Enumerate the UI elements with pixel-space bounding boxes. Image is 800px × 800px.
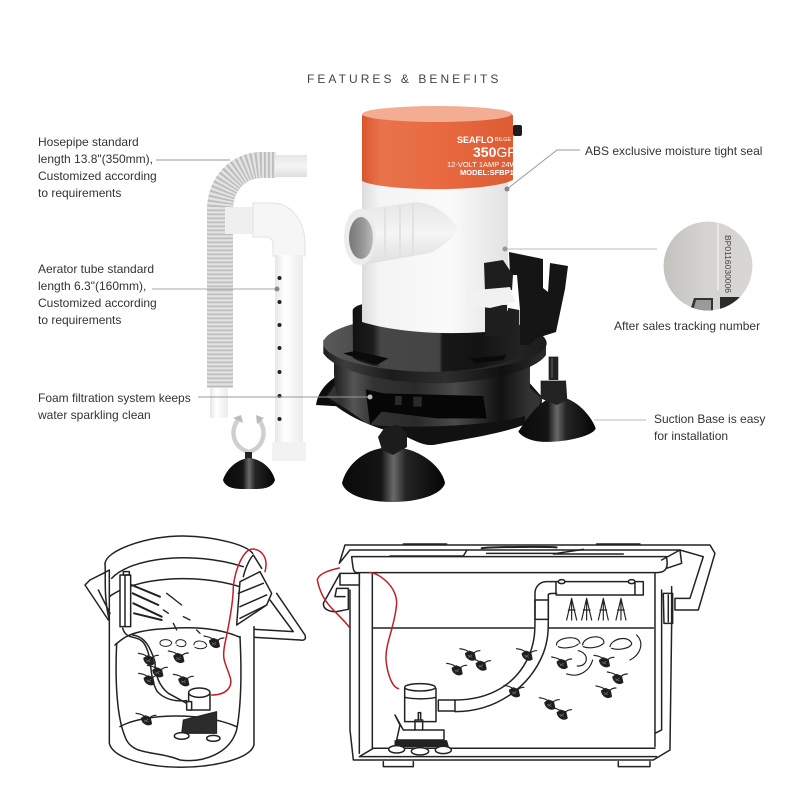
pipe: [455, 602, 535, 700]
orange cap: [362, 107, 513, 189]
leader: suction base: [594, 419, 646, 421]
text block: foam filtration: [37, 391, 191, 422]
label: 350GPH: [473, 144, 527, 160]
label: MODEL:SFBP1-G350: [460, 168, 535, 177]
text block: tracking number: After sales tracking number: [614, 319, 760, 333]
text block: hosepipe: [38, 135, 157, 200]
label: BILGE P: [495, 137, 517, 143]
bubbles: [160, 640, 207, 649]
spray lines: [132, 585, 162, 620]
right latch: [662, 550, 682, 623]
leader: tracking number: [502, 246, 657, 252]
small pump: [189, 688, 210, 697]
text block: aerator tube: [38, 262, 157, 327]
pump body: [362, 120, 508, 333]
lid: [339, 545, 715, 610]
left latch: [323, 573, 359, 612]
bucket outline: [109, 570, 254, 767]
text block: suction base: Suction Base is easy: [654, 412, 765, 426]
inset: tracking number photo: [664, 221, 752, 311]
text block: foam filtration: water sparkling clean: [37, 408, 151, 422]
text block: aerator tube: length 6.3"(160mm),: [38, 279, 146, 293]
disc: [323, 340, 546, 383]
text block: suction base: [654, 412, 765, 443]
bubbles: [557, 635, 641, 675]
outlet nozzle: [360, 202, 458, 265]
text block: hosepipe: Hosepipe standard: [38, 135, 139, 149]
aerator pipe: [120, 575, 131, 627]
water line: [372, 626, 653, 630]
leader: foam filtration: [198, 394, 372, 400]
text block: aerator tube: Customized according: [38, 296, 157, 310]
icon: corrugated hosepipe: [210, 155, 307, 418]
right suction cup: [518, 397, 596, 442]
red power cord: [212, 549, 266, 695]
leader: hosepipe: [156, 159, 230, 161]
base plate: [325, 381, 542, 445]
red power cord: [370, 573, 398, 689]
text block: hosepipe: to requirements: [38, 186, 121, 200]
leader: aerator tube: [152, 286, 280, 292]
left clip: [85, 570, 110, 620]
icon: bilge pump: [316, 106, 596, 502]
text block: hosepipe: length 13.8"(350mm),: [38, 152, 153, 166]
air stones: [204, 636, 224, 647]
icon: small suction cup with clip: [223, 415, 275, 489]
back left suction cup: [316, 377, 343, 407]
front suction cup: [342, 447, 445, 502]
text block: suction base: for installation: [654, 429, 728, 443]
black bracket: [509, 252, 568, 345]
label: SEAFLO: [457, 135, 494, 145]
icon: aerator tube: [225, 203, 306, 461]
text block: aerator tube: Aerator tube standard: [38, 262, 154, 276]
text block: foam filtration: Foam filtration system keeps: [38, 391, 191, 405]
diagram: bucket aerator: [85, 536, 305, 767]
front clip: [484, 260, 513, 336]
diagram: cooler aerator: [317, 544, 715, 767]
text block: hosepipe: Customized according: [38, 169, 157, 183]
leader: ABS seal: [504, 150, 580, 192]
white strap: [465, 287, 515, 308]
aeration bar: [556, 582, 643, 595]
label: [448, 136, 513, 175]
cooler walls: [350, 587, 672, 760]
pump: [405, 684, 435, 691]
label: 12-VOLT 1AMP 24W: [447, 160, 518, 169]
text block: ABS seal: ABS exclusive moisture tight seal: [585, 144, 762, 158]
water surface: [115, 628, 240, 645]
handle: [255, 593, 305, 640]
disc slots: [343, 351, 507, 365]
pump base: [316, 304, 596, 445]
upper ring: [353, 304, 519, 372]
bucket inner wall: [116, 637, 241, 761]
inset: tracking number photo: BP0116030006: [723, 235, 733, 293]
switch stub: [513, 125, 522, 136]
text block: aerator tube: to requirements: [38, 313, 121, 327]
filter housing: [334, 353, 530, 427]
spray jets: [567, 598, 626, 620]
title: FEATURES & BENEFITS: [307, 72, 501, 86]
air stones: [447, 663, 467, 675]
right knob highlight: [551, 358, 553, 378]
